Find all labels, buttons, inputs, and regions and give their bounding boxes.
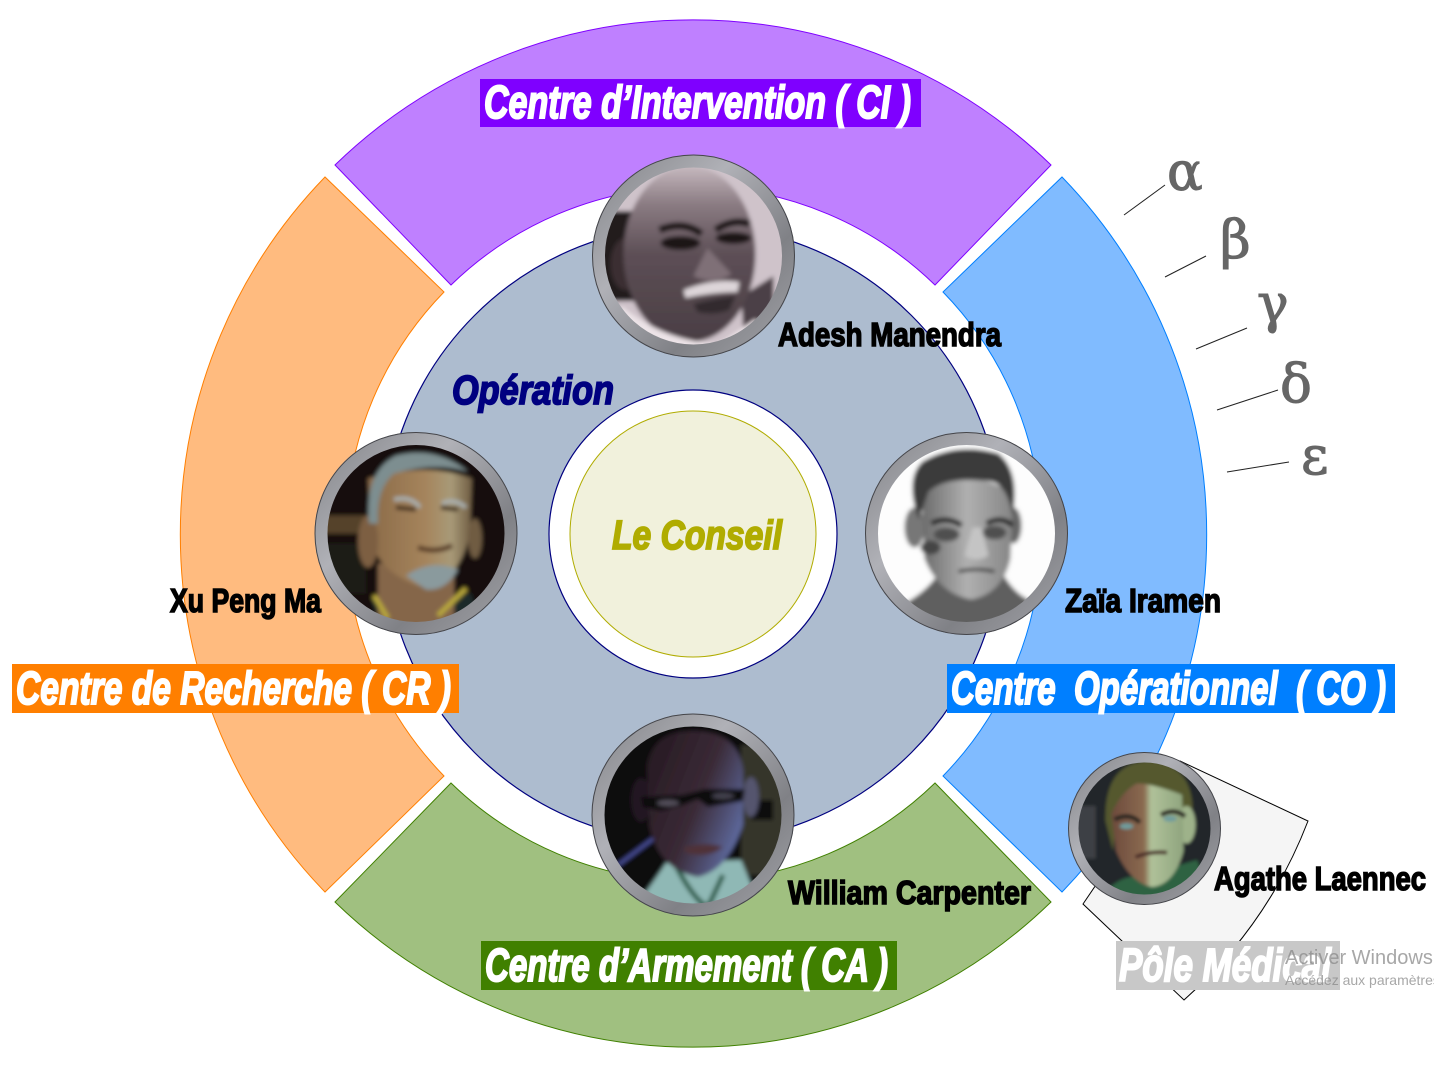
- portrait: Zaïa Iramen: [866, 432, 1068, 634]
- icon: greek alpha with leader line: [1124, 142, 1203, 215]
- icon: greek epsilon with leader line: ε: [1301, 426, 1328, 487]
- label: Zaïa Iramen: Zaïa Iramen: [1065, 582, 1221, 619]
- icon: greek beta with leader line: β: [1220, 210, 1251, 271]
- panel: white ring around council: [549, 390, 837, 678]
- portrait: Xu Peng Ma: [315, 432, 517, 634]
- panel: Centre d'Intervention sector: [335, 20, 1051, 285]
- heading: Le Conseil: Le Conseil: [612, 512, 783, 558]
- icon: greek beta with leader line: [1165, 210, 1251, 277]
- icon: greek delta with leader line: δ: [1280, 354, 1312, 415]
- panel: Opération disk: [384, 225, 1002, 843]
- heading: Centre de Recherche: Centre de Recherche ( CR ): [16, 662, 451, 714]
- label: William Carpenter: William Carpenter: [788, 874, 1031, 911]
- icon: greek gamma with leader line: [1196, 274, 1289, 349]
- label: Adesh Manendra: Adesh Manendra: [778, 316, 1002, 353]
- panel: Le Conseil circle: [570, 411, 816, 657]
- icon: greek alpha with leader line: α: [1167, 142, 1203, 203]
- heading: Opération: Opération: [452, 367, 614, 413]
- icon: greek epsilon with leader line: [1227, 426, 1328, 487]
- heading: Pôle Médical: Pôle Médical: [1119, 939, 1332, 991]
- label: Xu Peng Ma: Xu Peng Ma: [170, 582, 322, 619]
- panel: Centre de Recherche sector: [180, 177, 444, 892]
- watermark: Activer Windows: [1285, 947, 1434, 988]
- portrait: Adesh Manendra: [592, 155, 794, 357]
- portrait: Agathe Laennec: [1068, 752, 1220, 904]
- heading: Centre d'Armement: Centre d’Armement ( CA ): [485, 939, 888, 991]
- panel: Centre d'Armement sector: [335, 783, 1051, 1047]
- panel: Pôle Médical sector: [1083, 761, 1308, 1000]
- icon: greek gamma with leader line: γ: [1257, 274, 1289, 335]
- panel: Centre Opérationnel sector: [943, 177, 1207, 892]
- watermark: Activer Windows: Activer Windows: [1285, 947, 1433, 969]
- heading: Centre d'Intervention: Centre d’Intervention ( CI ): [484, 76, 911, 128]
- portrait: William Carpenter: [592, 714, 794, 916]
- icon: greek delta with leader line: [1217, 354, 1312, 415]
